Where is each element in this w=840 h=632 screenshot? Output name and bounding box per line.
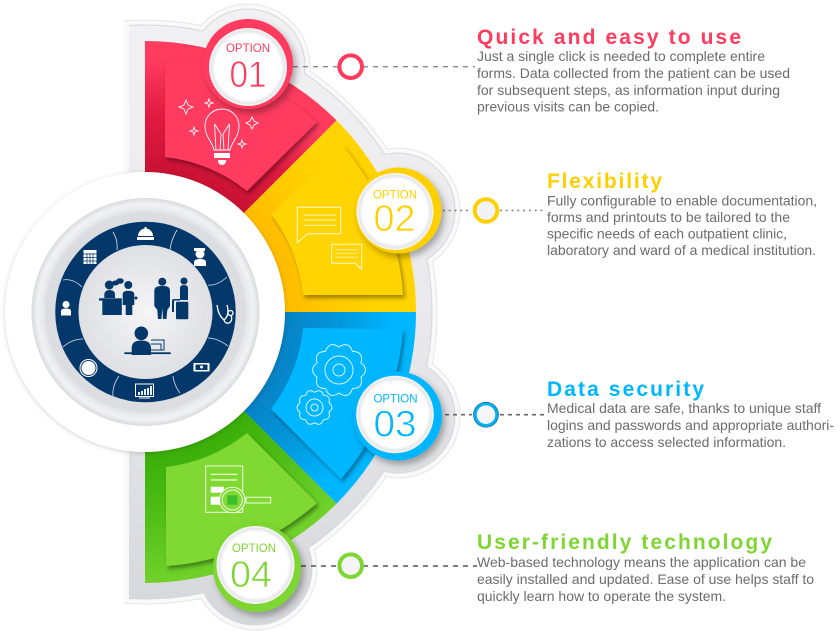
connector: option 02 [443, 199, 545, 222]
badge: option 03 [353, 372, 442, 460]
people: doctor and patient [154, 278, 188, 319]
badge: option 01 [203, 19, 293, 109]
text block: quick and easy to use [477, 26, 790, 114]
icon: gears [297, 345, 365, 424]
text block: user-friendly technology: easily installed and updated. Ease of use helps staff to [477, 571, 814, 587]
ring icon: calendar [84, 250, 96, 264]
connector: option 03 [445, 402, 546, 428]
icon: chat bubbles [297, 207, 362, 269]
text block: flexibility: specific needs of each outpatient clinic, [547, 226, 787, 242]
ring icon: banknote [194, 363, 210, 372]
flap: red [165, 59, 317, 191]
text block: data security: logins and passwords and appropriate authori- [547, 417, 834, 433]
text block: flexibility: Flexibility [547, 170, 662, 193]
text block: data security [547, 378, 834, 450]
text block: flexibility [547, 170, 817, 258]
text block: user-friendly technology: User-friendly technology [477, 531, 772, 554]
backing plate [124, 4, 460, 630]
sector: blue [145, 312, 416, 504]
people: person at laptop [124, 326, 171, 355]
flap: blue [271, 328, 403, 479]
sector: yellow [145, 120, 416, 312]
badge: option 04: OPTION [232, 541, 276, 555]
central disc [5, 172, 285, 452]
connector: option 04 [301, 554, 477, 577]
text block: quick and easy to use: Quick and easy to use [477, 26, 741, 49]
ring icon: headset [80, 360, 97, 376]
text block: data security: Medical data are safe, thanks to unique staff [547, 400, 821, 416]
text block: flexibility: forms and printouts to be tailored to the [547, 209, 790, 225]
badge: option 02: OPTION [373, 188, 417, 202]
text block: user-friendly technology [477, 531, 814, 604]
flap: green [166, 433, 317, 566]
badge: option 01: OPTION [226, 41, 270, 55]
text block: quick and easy to use: forms. Data collected from the patient can be used [477, 65, 790, 81]
navy ring [67, 234, 224, 390]
sector: green [145, 312, 337, 583]
people: reception desk [99, 278, 138, 315]
text block: quick and easy to use: for subsequent steps, as information input during [477, 82, 780, 98]
badge: option 02 [356, 168, 442, 254]
icon: light bulb [179, 99, 258, 165]
ring icon: person [61, 301, 71, 316]
text block: data security: zations to access selected information. [547, 434, 786, 450]
ring icon: nurse [194, 248, 206, 266]
badge: option 02: 02 [374, 198, 416, 239]
text block: quick and easy to use: Just a single click is needed to complete entire [477, 48, 765, 64]
badge: option 04: 04 [230, 554, 272, 595]
badge: option 03: 03 [374, 404, 416, 444]
ring icon: bell [137, 227, 154, 240]
text block: quick and easy to use: previous visits can be copied. [477, 98, 659, 114]
badge: option 03: OPTION [374, 392, 418, 406]
inner core [78, 245, 212, 379]
text block: user-friendly technology: Web-based technology means the application can be [477, 554, 806, 570]
ring icon: chart [136, 384, 154, 398]
ring separators [63, 230, 228, 396]
ring icon: stethoscope [217, 305, 233, 323]
text block: flexibility: laboratory and ward of a medical institution. [547, 242, 816, 258]
sector: red [145, 41, 337, 312]
connector: option 01 [293, 55, 475, 78]
badge: option 01: 01 [230, 54, 266, 95]
flap: yellow [271, 145, 403, 295]
text block: flexibility: Fully configurable to enable documentation, [547, 192, 817, 208]
text block: data security: Data security [547, 378, 704, 401]
text block: user-friendly technology: quickly learn how to operate the system. [477, 588, 726, 604]
badge: option 04 [213, 524, 301, 612]
icon: document with magnifier [206, 466, 271, 513]
